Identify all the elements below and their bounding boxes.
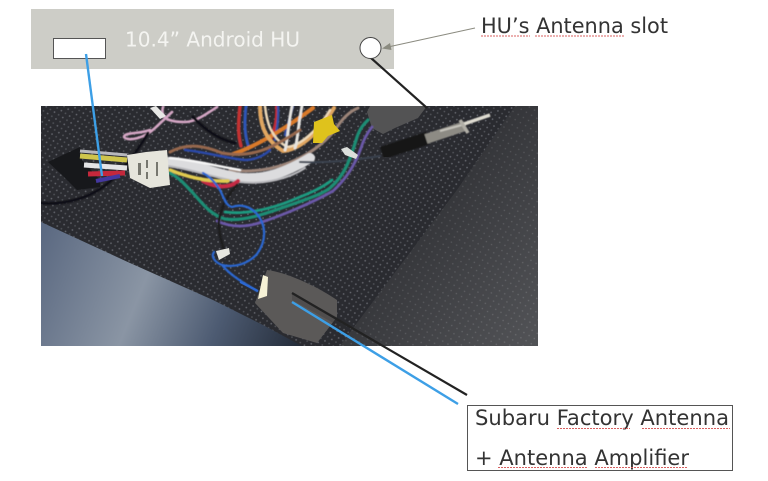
wire harness in the photo — [41, 106, 380, 291]
red wires at base — [203, 181, 238, 186]
photo of wiring harness — [41, 106, 538, 346]
right seat panel — [340, 106, 538, 346]
pink tied cable — [124, 107, 217, 139]
antenna plug — [382, 115, 490, 153]
cable tie on green wire — [341, 147, 358, 159]
connector slot — [54, 38, 106, 58]
white strands — [285, 106, 302, 150]
lower foam amplifier — [255, 270, 346, 343]
upper foam sleeve — [367, 106, 427, 134]
blue line: connector to harness — [86, 54, 102, 176]
yellow wire — [170, 170, 228, 181]
green and purple wires — [170, 120, 368, 220]
orange wire — [233, 108, 313, 154]
black connector — [48, 147, 127, 190]
antenna lead — [300, 156, 380, 162]
red and blue background wires — [239, 106, 241, 146]
head unit panel — [31, 9, 394, 69]
head unit label: 10.4” Android HU — [125, 28, 300, 52]
dark cable behind harness — [193, 117, 235, 143]
yellow RCA plug — [313, 115, 340, 143]
spellcheck squiggles — [481, 35, 625, 37]
white harness block — [127, 150, 170, 188]
cable tie on pink wire — [150, 106, 166, 119]
antenna slot — [360, 38, 381, 58]
callout: factory antenna: Subaru Factory Antenna — [475, 406, 729, 430]
blue antenna wire — [203, 173, 264, 291]
arrow to antenna slot — [382, 28, 475, 50]
pale orange loop — [260, 106, 334, 151]
white main bundle — [168, 158, 310, 178]
blue bundle wire — [185, 150, 270, 160]
blue line to antenna amplifier — [292, 302, 458, 404]
cable tie on blue wire — [216, 248, 230, 260]
blue wire tip at amplifier — [240, 282, 258, 291]
black line to factory antenna — [292, 293, 467, 395]
antenna slot label: HU’s Antenna slot — [481, 14, 668, 38]
black line: HU antenna slot to plug — [371, 58, 427, 108]
spellcheck squiggles — [498, 428, 730, 468]
black cable beside loop — [219, 185, 237, 251]
lower leather seat — [41, 222, 302, 346]
callout: factory antenna — [468, 406, 732, 470]
callout: factory antenna: + Antenna Amplifier — [475, 446, 689, 470]
brown wires — [170, 130, 300, 154]
black cable — [41, 133, 148, 203]
